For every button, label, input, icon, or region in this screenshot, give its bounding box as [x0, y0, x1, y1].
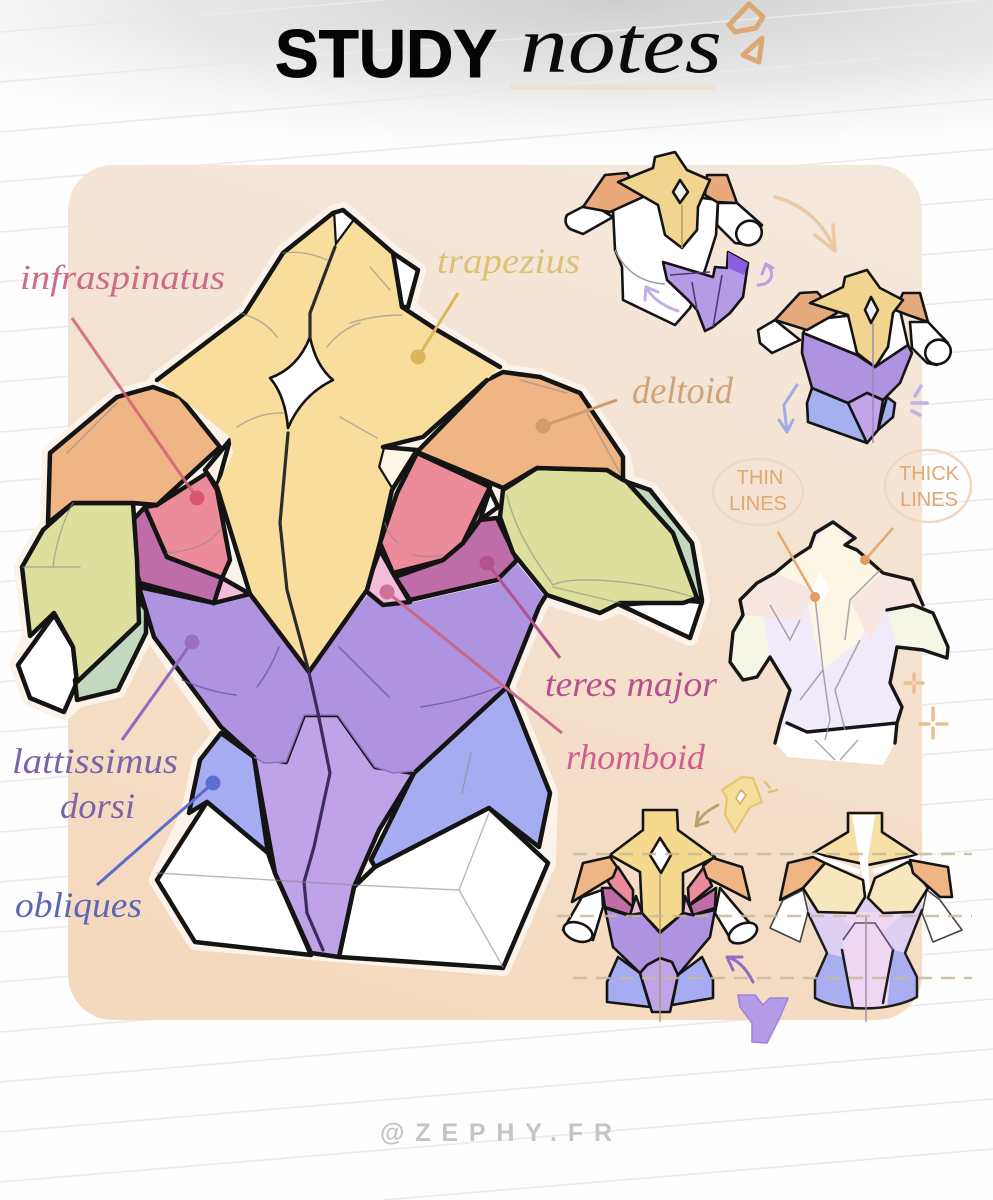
- label: rhomboid: [380, 584, 706, 777]
- icon: small lower back piece: [738, 995, 788, 1043]
- label: infraspinatus: infraspinatus: [20, 258, 225, 297]
- icon: lavender ticks: [912, 386, 927, 415]
- muscle: teres major: [130, 507, 517, 603]
- panel: peach background: [68, 165, 922, 1020]
- thick outline: [730, 522, 948, 743]
- callout: thick lines: [885, 450, 971, 522]
- arrow: blue down: [779, 385, 797, 432]
- thin inner lines: [770, 570, 880, 760]
- folded purple piece: [663, 252, 748, 331]
- label: lattissimus dorsi: lattissimus: [12, 741, 178, 781]
- figure white halo: [18, 210, 702, 968]
- muscle: infraspinatus: [145, 453, 490, 578]
- thumbnail: coloured back torso: [561, 810, 760, 1022]
- arrow: lavender left: [645, 287, 678, 311]
- muscle: obliques: [189, 687, 550, 867]
- title: [275, 0, 722, 92]
- leader line: [387, 592, 562, 733]
- muscle: arm green: [22, 468, 697, 682]
- label: infraspinatus: [20, 258, 225, 506]
- thumbnail: torso with lats: [758, 270, 955, 443]
- title: STUDY: [275, 16, 497, 92]
- label: teres major: [480, 556, 718, 704]
- icon: small trapezius piece: [722, 777, 777, 832]
- icon: title decoration: [729, 4, 763, 62]
- label: rhomboid: rhomboid: [566, 737, 706, 777]
- watermark: @ZEPHY.FR: [380, 1119, 612, 1147]
- label: trapezius: [410, 241, 580, 364]
- callout: thick lines: THICK: [899, 463, 960, 485]
- label: lattissimus dorsi: dorsi: [60, 786, 135, 826]
- leader line: [122, 642, 192, 740]
- muscle: latissimus dorsi: [139, 563, 545, 773]
- muscle: lower back: [254, 715, 414, 957]
- icon: sparkles: [905, 674, 947, 738]
- label: trapezius: trapezius: [437, 241, 580, 281]
- construction guide lines: [557, 854, 972, 978]
- callout: thin lines: THIN: [737, 467, 783, 489]
- muscle: rhomboid: [214, 550, 410, 605]
- muscle: trapezius: [157, 213, 500, 672]
- leader line: [543, 400, 617, 426]
- label: deltoid: [536, 370, 734, 434]
- thumbnail: pale anatomy torso: [770, 813, 962, 1022]
- pelvis boxes: [157, 802, 548, 968]
- muscle: white neck and hands: [18, 210, 702, 712]
- label: obliques: [15, 776, 220, 925]
- thumbnail: line weight torso: [730, 522, 948, 765]
- muscle: forearm teal: [75, 482, 702, 700]
- leader line: [97, 783, 213, 885]
- spine diamond: [270, 337, 333, 428]
- leader line: [72, 318, 197, 498]
- muscle: deltoid: [48, 372, 623, 523]
- label: deltoid: deltoid: [632, 370, 734, 412]
- callout: thin lines: LINES: [729, 493, 787, 515]
- leader lines: [778, 528, 893, 597]
- label: obliques: obliques: [15, 885, 142, 925]
- arrow: peach between torsos: [775, 197, 835, 251]
- main back figure: [18, 210, 702, 968]
- leader line: [418, 293, 458, 357]
- spine lines: [280, 247, 335, 950]
- arrow: lavender curl: [758, 264, 773, 285]
- leader line: [487, 563, 560, 658]
- label: lattissimus dorsi: [12, 634, 200, 826]
- title underline: [510, 84, 716, 90]
- thumbnail: torso without lats: [566, 152, 773, 331]
- callout: thick lines: LINES: [900, 489, 958, 511]
- arrow: purple to torso: [727, 957, 753, 982]
- callout: thin lines: [713, 459, 803, 525]
- anatomy sketch lines: [23, 252, 693, 967]
- arrow: olive to torso: [696, 805, 718, 826]
- label: teres major: teres major: [545, 664, 718, 704]
- title: notes: [520, 0, 722, 90]
